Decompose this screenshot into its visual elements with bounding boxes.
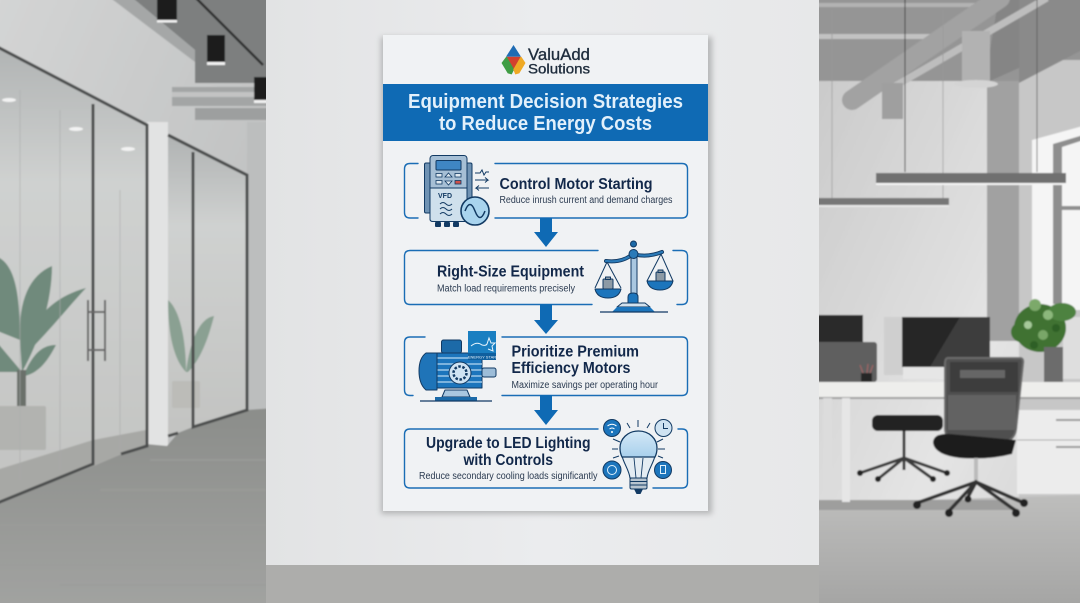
logo wordmark: ValuAdd [528, 46, 590, 64]
arrow 3 [534, 395, 558, 425]
background: feature wall [266, 0, 819, 566]
step 2 description: Match load requirements precisely [437, 284, 575, 294]
logo [502, 46, 590, 76]
title banner [383, 84, 708, 141]
poster shadow [381, 37, 712, 514]
step 1 description: Reduce inrush current and demand charges [500, 195, 672, 206]
step 4 frame [404, 429, 688, 488]
icon: energy star badge: ENERGY STAR [468, 354, 496, 360]
logo mark [502, 46, 525, 74]
icon: energy star badge [468, 331, 496, 360]
icon: balance scale [595, 241, 673, 312]
title banner: Equipment Decision Strategies [408, 91, 683, 113]
step 2 heading: Right-Size Equipment [437, 264, 584, 281]
step 1 heading: Control Motor Starting [500, 176, 652, 193]
icon: LED bulb with controls [603, 420, 672, 494]
step 3 description: Maximize savings per operating hour [512, 380, 659, 391]
icon: VFD drive [424, 156, 489, 227]
arrow 2 [534, 304, 558, 334]
title banner: to Reduce Energy Costs [439, 113, 652, 135]
step 2 frame [404, 250, 688, 304]
background: floor below wall [266, 565, 819, 603]
logo: Solutions [528, 60, 590, 76]
icon: VFD drive: VFD [438, 193, 452, 200]
icon: electric motor [419, 340, 496, 401]
step 3: premium efficiency motors: Efficiency Motors [512, 360, 630, 377]
step 3: premium efficiency motors [404, 331, 688, 401]
poster panel [383, 35, 708, 511]
step 3 heading: Prioritize Premium [512, 344, 639, 361]
step 4: LED lighting [404, 420, 688, 494]
step 4: LED lighting: with Controls [463, 452, 553, 469]
step 4 heading: Upgrade to LED Lighting [426, 435, 590, 452]
step 4 description: Reduce secondary cooling loads significantly [419, 471, 598, 482]
step 1 frame [404, 164, 688, 218]
step 2: right-size equipment [404, 241, 688, 312]
step 3 frame [404, 337, 688, 396]
step 1: control motor starting [404, 156, 688, 227]
background: left corridor with glass partitions [0, 0, 276, 603]
background: right open-plan office [810, 0, 1080, 603]
arrow 1 [534, 218, 558, 247]
